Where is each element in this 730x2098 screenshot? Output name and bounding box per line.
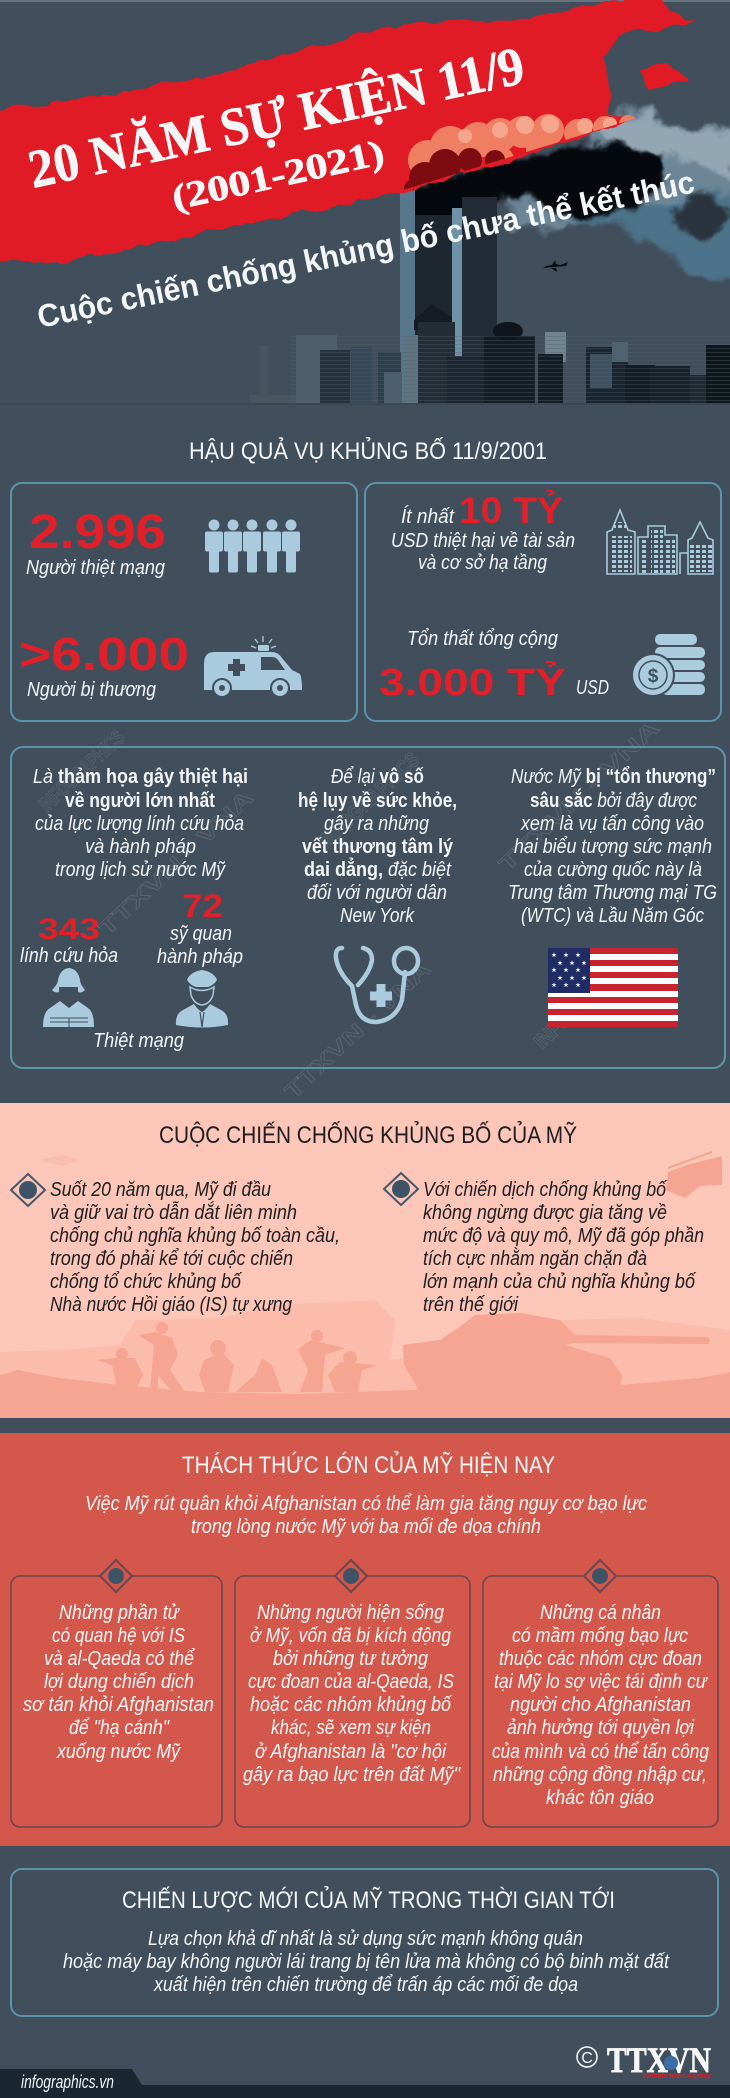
card 3: [483, 1560, 718, 1827]
number: 10 billion: 10 TỶ: [459, 490, 563, 531]
label: officers: sỹ quan: [170, 922, 232, 945]
column 2: health consequences: Để lại vô số: [331, 765, 424, 788]
icon: US flag: [548, 948, 678, 1027]
number: 343: 343: [38, 913, 100, 946]
unit: USD: USD: [576, 676, 609, 699]
card 2 diamond: [335, 1560, 367, 1592]
text block left: trong đó phải kể tới cuộc chiến: [50, 1247, 293, 1270]
column 2: health consequences: hệ lụy về sức khỏe,: [298, 789, 457, 812]
card 1 text: Những phần tử: [59, 1601, 181, 1624]
text block right: trên thế giới: [423, 1293, 519, 1316]
label: firefighters: lính cứu hỏa: [20, 944, 118, 967]
red brush banner: [0, 0, 694, 263]
grey-blue smoke cloud: [512, 108, 730, 282]
intro text: Việc Mỹ rút quân khỏi Afghanistan có thể làm gia tăng nguy cơ bạo lực: [85, 1492, 648, 1515]
card 2 text: bởi những tư tưởng: [273, 1647, 429, 1670]
text block left: và giữ vai trò dẫn dắt liên minh: [50, 1201, 297, 1224]
footer bar: [0, 2069, 730, 2098]
card 3 text: thuộc các nhóm cực đoan: [499, 1647, 702, 1670]
text block left: chống tổ chức khủng bố: [50, 1270, 242, 1293]
label: casualties: Thiệt mạng: [93, 1029, 185, 1052]
description: property damage: [391, 529, 575, 574]
column 1: firefighters and officers: và hành pháp: [85, 835, 196, 858]
text block left: Nhà nước Hồi giáo (IS) tự xưng: [50, 1293, 293, 1316]
heading: consequences: HẬU QUẢ VỤ KHỦNG BỐ 11/9/2001: [189, 436, 547, 465]
bullet diamond left: [11, 1174, 45, 1206]
card 3 text: Những cá nhân: [540, 1601, 661, 1624]
icon: ambulance: [204, 636, 302, 697]
column 3: symbols of power: [508, 765, 717, 1027]
number: 72: 72: [182, 888, 223, 924]
header illustration: burning towers and skyline: [0, 108, 730, 405]
column 2: health consequences: gây ra những: [324, 812, 430, 835]
column 1: firefighters and officers: trong lịch sử nước Mỹ: [55, 858, 227, 881]
panel: three impact columns: [11, 747, 725, 1068]
intro text: trong lòng nước Mỹ với ba mối đe dọa chính: [191, 1515, 541, 1538]
label: officers: [157, 922, 243, 968]
text block left: Suốt 20 năm qua, Mỹ đi đầu: [50, 1178, 271, 1201]
card 1: [11, 1560, 222, 1827]
card 2 text: gây ra bạo lực trên đất Mỹ": [243, 1763, 462, 1786]
silhouette: soldiers, tank and ground: [0, 1152, 730, 1418]
text block right: Với chiến dịch chống khủng bố: [423, 1178, 667, 1201]
copyright mark: C: [581, 2050, 593, 2067]
logo tagline: Vietnam News Agency: [642, 2073, 711, 2080]
logo wordmark: TTXVN: [607, 2040, 711, 2080]
heading: CHIẾN LƯỢC MỚI CỦA MỸ TRONG THỜI GIAN TỚI: [122, 1885, 615, 1914]
label: injured: Người bị thương: [27, 678, 157, 701]
label: officers: hành pháp: [157, 945, 243, 968]
card 3 text: người cho Afghanistan: [510, 1693, 691, 1716]
card 2 text: hoặc các nhóm khủng bố: [250, 1693, 452, 1716]
card 3 text: ảnh hưởng tới quyền lợi: [507, 1716, 695, 1739]
column 3: symbols of power: xem là vụ tấn công vào: [520, 812, 704, 835]
card 2 text: Những người hiện sống: [257, 1601, 445, 1624]
text block left: [50, 1178, 340, 1316]
text block left: chống chủ nghĩa khủng bố toàn cầu,: [50, 1224, 340, 1247]
card 3 text: có mầm mống bạo lực: [512, 1624, 689, 1647]
panel: new strategy: [11, 1869, 718, 2016]
card 2 text: [243, 1601, 462, 1786]
heading: CUỘC CHIẾN CHỐNG KHỦNG BỐ CỦA MỸ: [159, 1120, 577, 1149]
card 2: [235, 1560, 470, 1827]
watermarks: TTXVN - VNA: [495, 717, 664, 877]
column 2: health consequences: vết thương tâm lý: [302, 835, 454, 858]
watermarks: [35, 717, 664, 1104]
card 1 text: để "hạ cánh": [69, 1716, 170, 1739]
icon: police officer: [176, 970, 228, 1028]
column 3: symbols of power: sâu sắc bởi đây được: [530, 788, 698, 812]
text block right: không ngừng được gia tăng về: [423, 1201, 667, 1224]
number: injured: >6.000: [19, 628, 189, 680]
column 3: symbols of power: của cường quốc này là: [524, 858, 702, 881]
intro text: [85, 1492, 648, 1538]
panel: economic damage: [365, 483, 721, 721]
strategy text: Lựa chọn khả dĩ nhất là sử dụng sức mạnh không quân: [148, 1927, 583, 1950]
bullet diamond right: [384, 1173, 418, 1205]
watermarks: TTXVN - VNA: [281, 957, 435, 1104]
card 2 text: ở Afghanistan là "cơ hội: [255, 1740, 447, 1763]
watermarks: INFOGRAPHICS: [530, 945, 644, 1054]
column 1: firefighters and officers: của lực lượng lính cứu hỏa: [35, 812, 244, 835]
strategy text: xuất hiện trên chiến trường để trấn áp các mối đe dọa: [153, 1973, 578, 1996]
card 3 text: khác tôn giáo: [546, 1786, 654, 1809]
card 1 text: [23, 1601, 214, 1763]
column 2: health consequences: New York: [340, 904, 415, 927]
icon: firefighter: [43, 968, 94, 1027]
column 1: firefighters and officers: [20, 765, 248, 1052]
icon: five people: [205, 520, 300, 572]
card 1 text: sơ tán khỏi Afghanistan: [23, 1693, 214, 1716]
label: killed: Người thiệt mạng: [26, 556, 166, 579]
card 3 diamond: [584, 1560, 616, 1592]
site name: infographics.vn: [21, 2072, 114, 2092]
description: property damage: và cơ sở hạ tầng: [418, 551, 548, 574]
text block right: lớn mạnh của chủ nghĩa khủng bố: [423, 1270, 696, 1293]
column 2: health consequences: dai dẳng, đặc biệt: [304, 857, 452, 881]
heading: THÁCH THỨC LỚN CỦA MỸ HIỆN NAY: [182, 1450, 555, 1479]
panel: casualties: [11, 483, 357, 721]
card 3 text: [492, 1601, 709, 1809]
section: US war on terror: [0, 1103, 730, 1418]
logo: TTXVN: [577, 2040, 711, 2080]
left tower: [400, 190, 452, 403]
burning cloud over banner: [404, 114, 637, 196]
card 1 text: và al-Qaeda có thể: [44, 1647, 195, 1670]
strategy text: hoặc máy bay không người lái trang bị tên lửa mà không có bộ binh mặt đất: [63, 1950, 670, 1973]
card 1 text: có quan hệ với IS: [52, 1624, 185, 1647]
title years: (2001-2021): [168, 132, 388, 218]
card 1 text: lợi dụng chiến dịch: [44, 1670, 194, 1693]
section: current challenges: [0, 1433, 730, 1846]
number: killed: 2.996: [29, 506, 166, 559]
watermarks: INFOGRAPHICS: [35, 726, 129, 817]
icon: stethoscope: [336, 948, 418, 1022]
icon: coins: [631, 634, 705, 697]
silhouette: background ruins: [0, 1300, 730, 1418]
watermarks: INFOGRAPHICS: [314, 748, 424, 854]
skyline buildings: [0, 304, 730, 405]
column 1: firefighters and officers: Là thảm họa gây thiệt hại: [33, 765, 248, 788]
dollar sign: $: [648, 666, 659, 687]
card 1 text: xuống nước Mỹ: [56, 1740, 182, 1763]
number: 3000 billion: 3.000 TỶ: [379, 660, 566, 704]
watermarks: TTXVN - VNA: [95, 786, 258, 941]
black smoke band: [405, 143, 668, 232]
card 1 diamond: [100, 1560, 132, 1592]
subtitle: Cuộc chiến chống khủng bố chưa thể kết thúc: [34, 164, 697, 335]
column 1: firefighters and officers: về người lớn nhất: [65, 789, 215, 812]
right tower: [452, 197, 497, 403]
column 2: health consequences: [298, 765, 457, 1022]
label: total loss: Tổn thất tổng cộng: [407, 627, 559, 650]
label: at least: Ít nhất: [401, 505, 455, 528]
strategy text: [63, 1927, 670, 1996]
text block right: [423, 1178, 704, 1316]
column 2: health consequences: đối với người dân: [307, 881, 447, 904]
description: property damage: USD thiệt hại về tài sản: [391, 529, 575, 552]
card 2 text: cực đoan của al-Qaeda, IS: [248, 1670, 454, 1693]
airplane: [543, 260, 568, 272]
title: 20 NĂM SỰ KIỆN 11/9: [23, 35, 529, 200]
icon: buildings: [607, 510, 713, 574]
card 2 text: ở Mỹ, vốn đã bị kích động: [250, 1624, 452, 1647]
card 2 text: khác, sẽ xem sự kiện: [271, 1716, 431, 1739]
text block right: tích cực nhằm ngăn chặn đà: [423, 1247, 647, 1270]
